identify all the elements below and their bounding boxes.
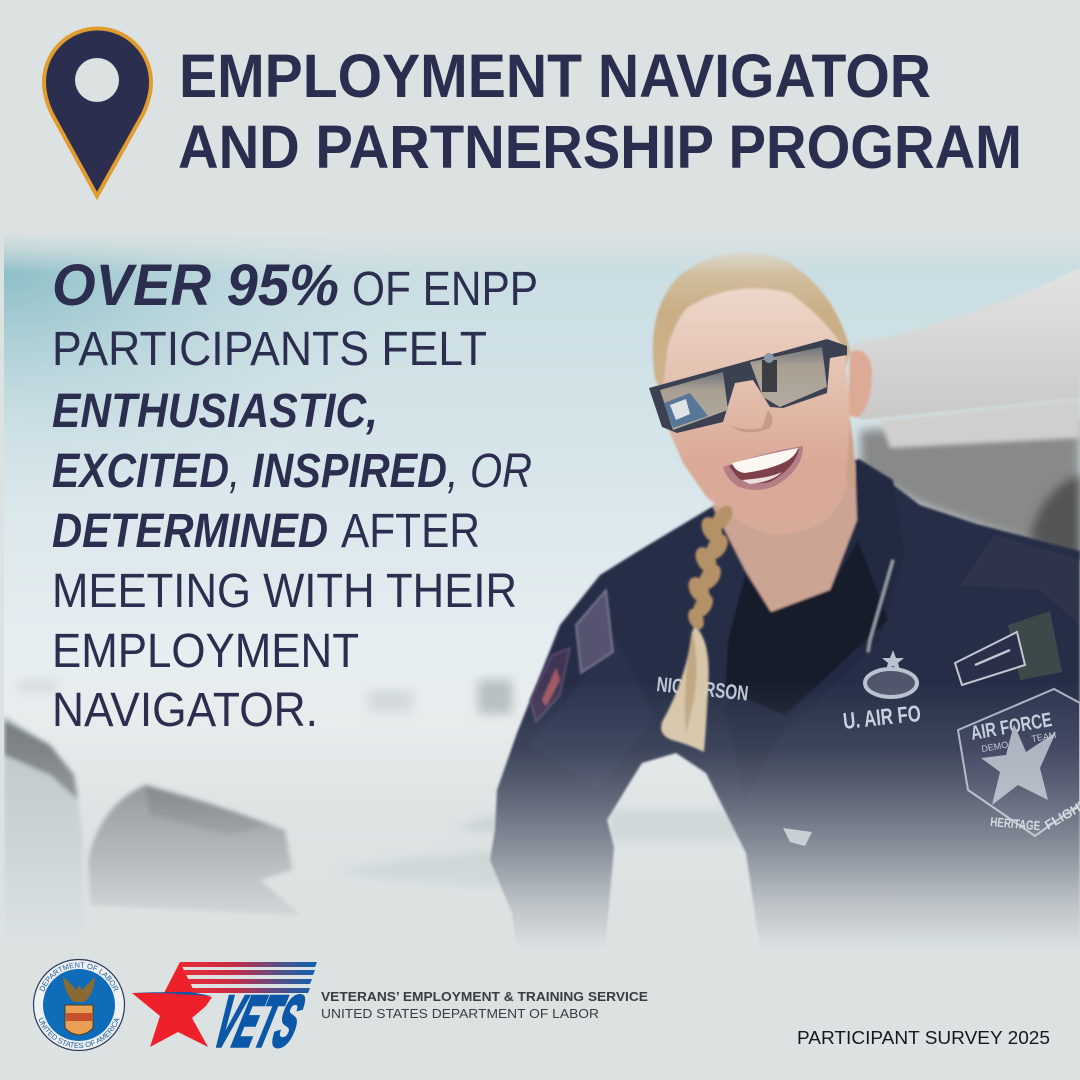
gradient stripes (180, 962, 317, 967)
main statement text: EMPLOYMENT (52, 625, 359, 678)
uniform insignia: U. AIR FO (842, 700, 922, 734)
dog tag chain (868, 560, 893, 652)
main statement text: PARTICIPANTS FELT (52, 323, 487, 376)
smile (723, 446, 803, 490)
black undershirt (725, 540, 888, 715)
uniform insignia (783, 611, 1062, 846)
shoulder patches (530, 590, 613, 722)
agency name: VETERANS’ EMPLOYMENT & TRAINING SERVICE (321, 989, 648, 1004)
logo: Department of Labor seal (32, 958, 126, 1052)
bottom fade of photo (0, 680, 1080, 956)
head with hair and ear (653, 253, 872, 535)
Air Force heritage flight patch: AIR FORCE (969, 709, 1054, 745)
main statement text: DETERMINED (52, 505, 328, 558)
agency name: UNITED STATES DEPARTMENT OF LABOR (321, 1006, 599, 1021)
agency name (321, 989, 648, 1021)
main statement text: ENTHUSIASTIC, (52, 385, 378, 438)
icon: location pin (44, 28, 151, 196)
main statement text: OF ENPP (352, 263, 538, 316)
seal ring text top: DEPARTMENT OF LABOR (39, 962, 118, 992)
sunglasses (649, 339, 847, 433)
main statement text: AFTER (341, 505, 480, 558)
seal ring text bottom: UNITED STATES OF AMERICA (39, 1018, 120, 1048)
seal shield (65, 1005, 93, 1035)
uniform name tape: NICKERSON (655, 673, 749, 706)
Air Force heritage flight patch: DEMO (981, 739, 1009, 754)
red star (132, 962, 212, 1047)
main statement text: , (229, 445, 240, 498)
nose shadow (730, 410, 773, 432)
neck (712, 462, 857, 612)
Air Force heritage flight patch: TEAM (1031, 730, 1057, 744)
VETS wordmark: VETS (203, 981, 315, 1061)
blue swoosh (132, 992, 212, 996)
title: EMPLOYMENT NAVIGATOR (179, 42, 931, 110)
main statement text: INSPIRED (252, 445, 447, 498)
seal eagle (63, 977, 95, 1002)
braid (661, 502, 737, 752)
main statement text: OVER 95% (52, 253, 339, 318)
main statement text: , OR (447, 445, 532, 498)
main statement text (52, 253, 538, 737)
title (178, 42, 1022, 181)
top fade of photo (4, 235, 1080, 270)
survey source note: PARTICIPANT SURVEY 2025 (797, 1028, 1050, 1048)
flight suit torso (490, 459, 1080, 955)
main statement text: NAVIGATOR. (52, 684, 318, 737)
Air Force heritage flight patch: HERITAGE (990, 814, 1041, 833)
main statement text: EXCITED (52, 445, 229, 498)
aircraft wing behind pilot (850, 268, 1080, 560)
main statement text: MEETING WITH THEIR (52, 565, 517, 618)
title: AND PARTNERSHIP PROGRAM (178, 113, 1022, 181)
photo sky and tarmac background (4, 238, 1080, 882)
photo: pilot smiling in flight suit beside aircraft (0, 232, 1080, 956)
logo: VETS star and stripes (132, 962, 317, 1061)
Air Force heritage flight patch (958, 689, 1080, 836)
blurred foreground aircraft shapes (4, 715, 295, 914)
